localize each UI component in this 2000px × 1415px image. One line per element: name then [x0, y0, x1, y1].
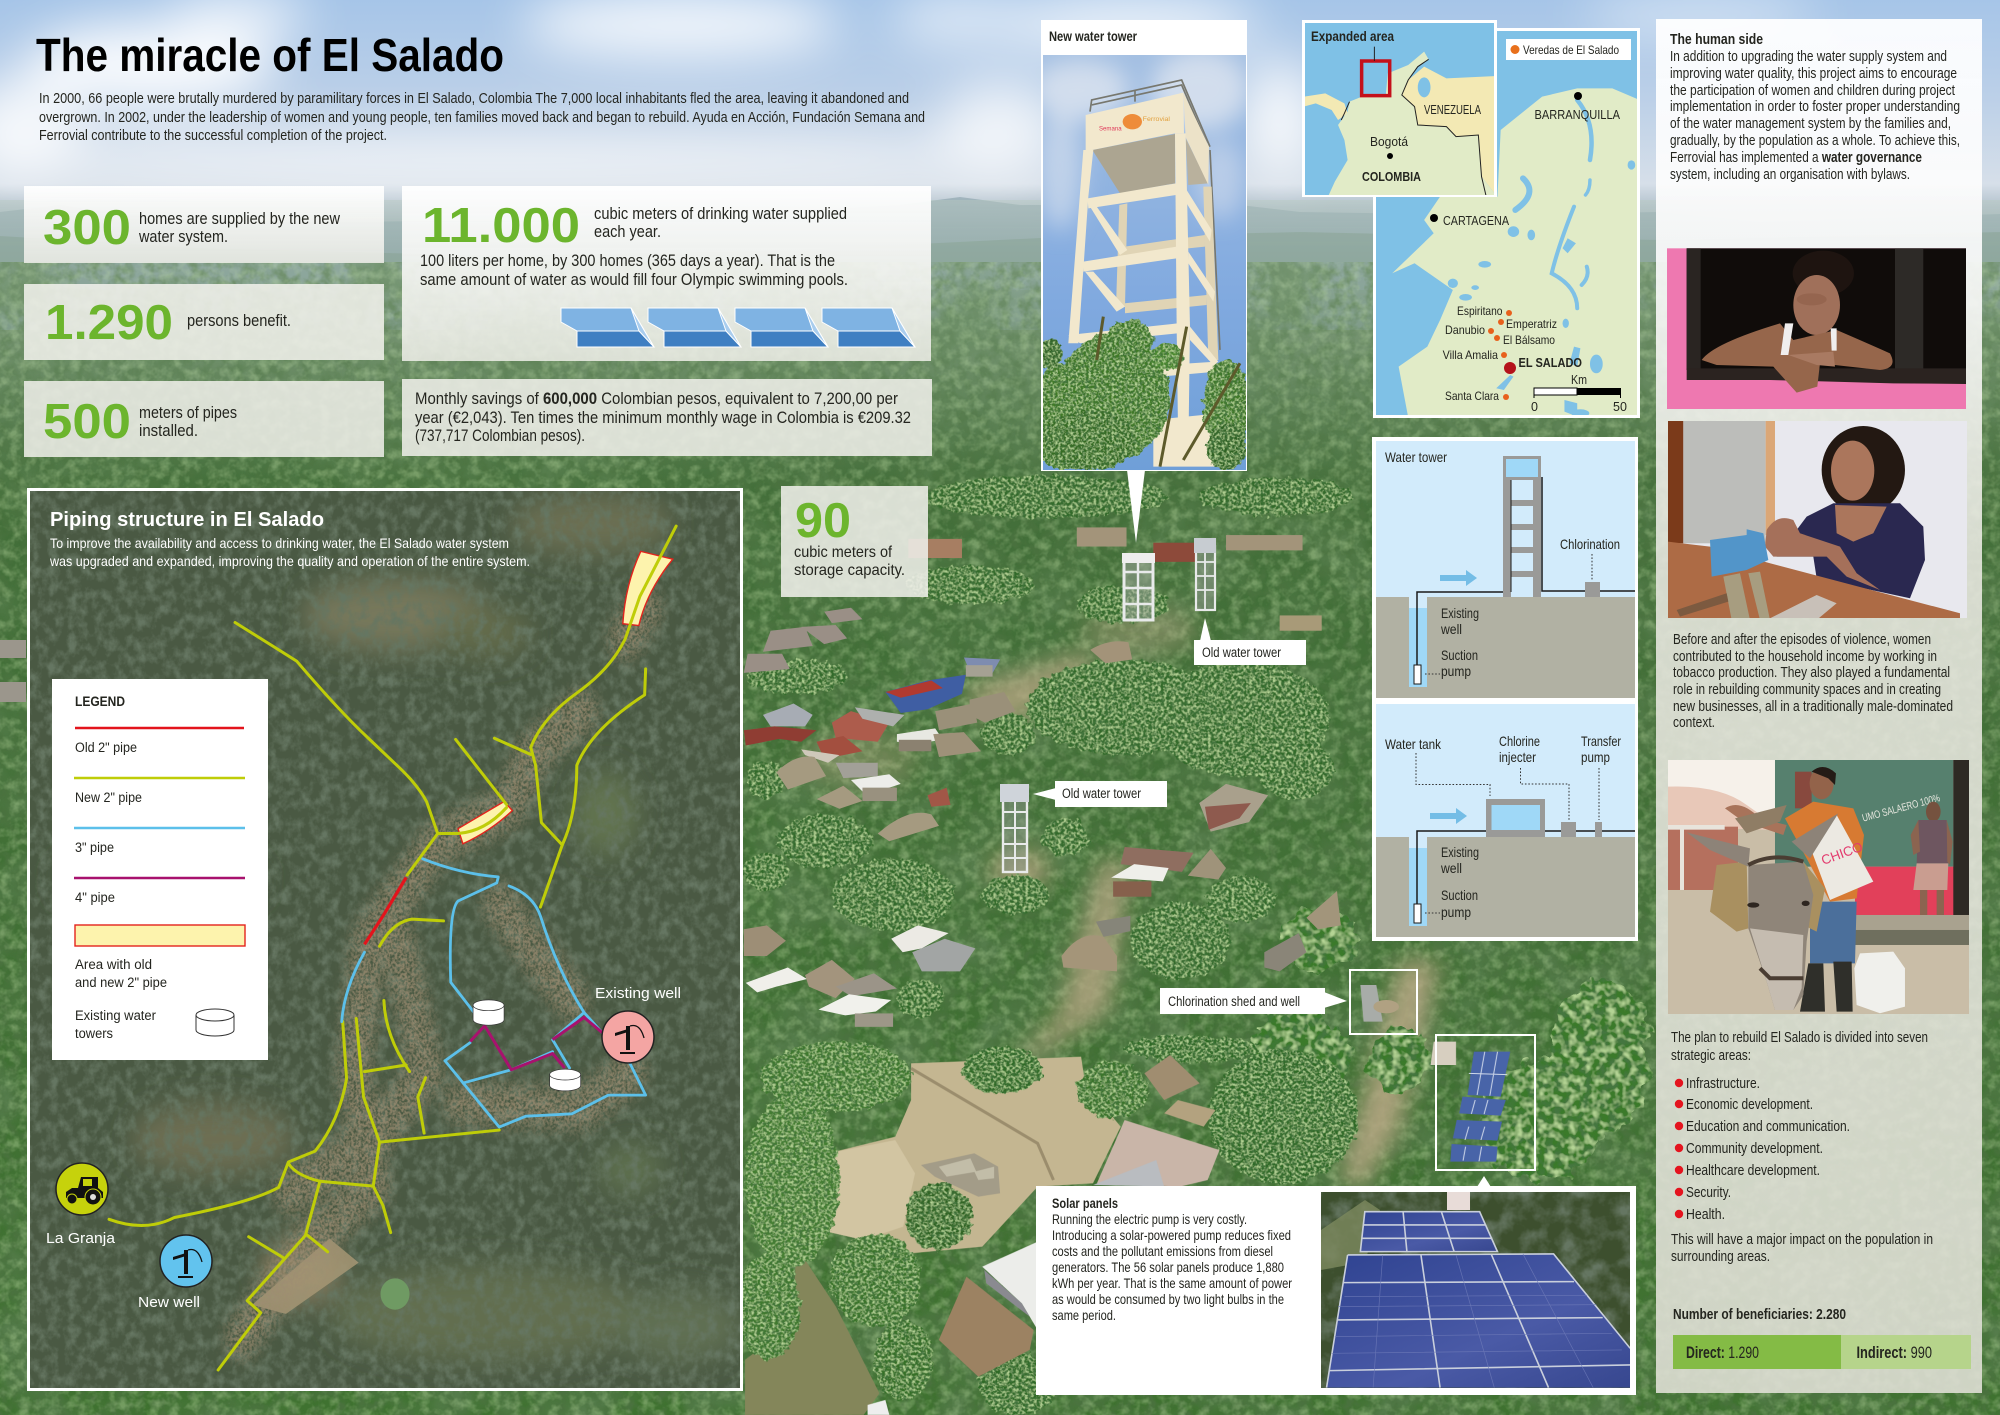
map scale bar: 50 — [1613, 400, 1627, 414]
women paragraph — [1673, 632, 1953, 731]
women paragraph: context. — [1673, 715, 1715, 731]
beneficiaries bar: Direct: 1.290 — [1686, 1343, 1759, 1362]
stat: 11.000 cubic meters with pools: each year. — [594, 223, 661, 241]
diagram: water tower system: Water tower — [1385, 449, 1447, 465]
diagram: water tower system: Suction — [1441, 647, 1478, 663]
stat: 1.290 persons: persons benefit. — [187, 312, 291, 330]
diagram: water tank system: injecter — [1499, 749, 1536, 765]
stat: 1.290 persons: 1.290 — [45, 296, 173, 350]
solar panels text: as would be consumed by two light bulbs in the — [1052, 1291, 1284, 1307]
3 inch pipes — [342, 859, 646, 1127]
scene water towers — [1000, 538, 1216, 872]
city labels — [1430, 92, 1620, 403]
solar panels text: Running the electric pump is very costly. — [1052, 1211, 1247, 1227]
photo: man with donkey — [1668, 760, 1970, 1015]
callout: old water tower (lower) — [1033, 781, 1167, 807]
stat: 11.000 cubic meters with pools — [402, 186, 931, 361]
right slope trees — [1250, 910, 1650, 1180]
diagram: water tank system: well — [1440, 860, 1462, 876]
stat: 500 meters: 500 — [43, 395, 131, 449]
dirt paths in upper village — [800, 604, 1440, 1190]
icon: existing well hand pump: Existing well — [595, 985, 681, 1002]
diagram: water tank system: Chlorine — [1499, 733, 1540, 749]
map scale bar — [1531, 388, 1627, 414]
highlight frames on shed and solar array — [1350, 970, 1535, 1170]
women paragraph: contributed to the household income by working in — [1673, 649, 1937, 665]
4 inch pipes — [470, 1017, 603, 1070]
diagram: water tank system — [1376, 704, 1635, 937]
stat: 300 homes: homes are supplied by the new — [139, 210, 340, 228]
human side paragraph — [1670, 49, 1960, 183]
panel: water tower system diagrams — [1372, 437, 1638, 941]
map heading: Piping structure in El Salado — [50, 508, 324, 531]
diagram: water tank system: pump — [1441, 904, 1471, 920]
bullet list: seven strategic areas: Health. — [1686, 1207, 1725, 1223]
solar panels text — [1052, 1195, 1292, 1323]
solar panels photo — [1321, 1192, 1630, 1388]
solar panels text: Solar panels — [1052, 1195, 1118, 1211]
plan intro text — [1671, 1030, 1928, 1064]
panel: solar panels — [1036, 1176, 1636, 1395]
old 2 inch pipe — [364, 877, 406, 944]
aerial solar array — [1360, 985, 1510, 1162]
intro paragraph: Ferrovial contribute to the successful completion of the project. — [39, 127, 387, 144]
stat: 11.000 cubic meters with pools: cubic meters of drinking water supplied — [594, 205, 847, 223]
panel: new water tower photo: New water tower — [1049, 29, 1138, 44]
intro paragraph — [39, 90, 925, 144]
human side paragraph: Ferrovial has implemented a water governance — [1670, 150, 1922, 166]
stat: 500 meters: installed. — [139, 422, 198, 440]
legend: New 2" pipe — [75, 790, 142, 805]
beneficiaries heading: Number of beneficiaries: 2.280 — [1673, 1307, 1846, 1323]
stat: 90 cubic meters storage: storage capacity. — [794, 562, 905, 579]
diagram: water tank system: Existing — [1441, 844, 1479, 860]
stat: 300 homes: water system. — [138, 228, 228, 246]
photo: man with donkey: CHICO — [1819, 839, 1865, 868]
left strip houses — [0, 640, 26, 702]
inset labels: COLOMBIA — [1362, 169, 1422, 184]
women paragraph: tobacco production. They also played a fundamental — [1673, 665, 1950, 681]
impact text: This will have a major impact on the population in — [1671, 1232, 1933, 1248]
icon: new well hand pump: New well — [138, 1294, 200, 1311]
legend: Area with old — [75, 957, 152, 972]
diagram: water tank system: Suction — [1441, 887, 1478, 903]
intro paragraph: In 2000, 66 people were brutally murdered by paramilitary forces in El Salado, Colombia The 7,000 local inhabitants fled the area, leaving it abandoned and — [39, 90, 909, 107]
legend: 4" pipe — [75, 890, 115, 905]
diagram: water tank system: Transfer — [1581, 733, 1621, 749]
beneficiaries bar — [1673, 1335, 1971, 1369]
diagram: water tank system: pump — [1581, 749, 1610, 765]
solar panels text: costs and the pollutant emissions from diesel — [1052, 1243, 1273, 1259]
city labels: Santa Clara — [1445, 389, 1499, 403]
stat: 11.000 cubic meters with pools: same amount of water as would fill four Olympic swimming pools. — [420, 271, 848, 289]
stat: 300 homes — [24, 186, 384, 263]
bullet list: seven strategic areas — [1675, 1076, 1850, 1223]
callout: old water tower (lower): Old water tower — [1062, 786, 1141, 801]
map description: To improve the availability and access to drinking water, the El Salado water system — [50, 535, 509, 551]
inset labels: VENEZUELA — [1424, 102, 1481, 117]
icons: existing water towers — [473, 1000, 581, 1091]
stat: 500 meters: meters of pipes — [139, 404, 237, 422]
city labels: CARTAGENA — [1443, 213, 1509, 228]
legend — [52, 679, 268, 1060]
solar panels text: generators. The 56 solar panels produce 1,880 — [1052, 1259, 1284, 1275]
stat: 500 meters — [24, 381, 384, 457]
solar panels text: Introducing a solar-powered pump reduces fixed — [1052, 1227, 1291, 1243]
title: The miracle of El Salado — [36, 29, 504, 81]
city labels: Espiritano — [1457, 304, 1503, 318]
city labels: Villa Amalia — [1443, 348, 1498, 362]
panel: location map — [1373, 28, 1640, 418]
savings text box — [402, 379, 932, 456]
solar panels text: kWh per year. That is the same amount of power — [1052, 1275, 1292, 1291]
panel: new water tower photo — [1030, 20, 1250, 543]
icon: new well hand pump — [138, 1235, 212, 1311]
diagram: water tower system: well — [1440, 621, 1462, 637]
panel: expanded area inset map — [1302, 20, 1497, 197]
city labels: EL SALADO — [1518, 355, 1582, 370]
city labels: El Bálsamo — [1503, 333, 1555, 347]
bullet list: seven strategic areas: Economic development. — [1686, 1097, 1813, 1113]
bullet list: seven strategic areas: Infrastructure. — [1686, 1076, 1760, 1092]
stat: 90 cubic meters storage — [781, 486, 928, 597]
city labels: BARRANQUILLA — [1534, 107, 1620, 122]
upper village trees — [744, 476, 1352, 1017]
inset labels: Bogotá — [1370, 134, 1409, 149]
city labels: Danubio — [1445, 323, 1485, 337]
panel: new water tower photo: Ferrovial — [1143, 116, 1171, 123]
diagram: water tank system: Water tank — [1385, 736, 1442, 752]
stat: 1.290 persons — [24, 284, 384, 360]
diagram: water tower system: Existing — [1441, 605, 1479, 621]
bullet list: seven strategic areas: Community development. — [1686, 1141, 1823, 1157]
legend: and new 2" pipe — [75, 975, 167, 990]
icon: existing well hand pump — [595, 985, 681, 1063]
impact text: surrounding areas. — [1671, 1249, 1770, 1265]
diagram: water tower system — [1376, 441, 1635, 698]
stat: 11.000 cubic meters with pools: 100 liters per home, by 300 homes (365 days a year). That is the — [420, 252, 835, 270]
photo: girl at pink window — [1667, 248, 1967, 410]
new 2 inch pipes — [109, 526, 676, 1370]
plan intro text: The plan to rebuild El Salado is divided into seven — [1671, 1030, 1928, 1046]
human side heading: The human side — [1670, 31, 1763, 48]
panel: the human side column — [1656, 19, 1982, 1393]
savings text box: (737,717 Colombian pesos). — [415, 427, 585, 445]
plan intro text: strategic areas: — [1671, 1048, 1751, 1064]
map legend: veredas: Veredas de El Salado — [1523, 43, 1619, 57]
stat: 90 cubic meters storage: cubic meters of — [794, 544, 893, 561]
village built-up area — [242, 609, 645, 1338]
legend: towers — [75, 1026, 113, 1041]
callout: old water tower (upper) — [1194, 618, 1306, 665]
callout: old water tower (upper): Old water tower — [1202, 645, 1281, 660]
diagram: water tower system: Chlorination — [1560, 536, 1620, 552]
women paragraph: role in rebuilding community spaces and in creating — [1673, 682, 1941, 698]
intro paragraph: overgrown. In 2002, under the leadership of women and young people, ten families moved back and began to rebuild. Ayuda en Acción, Fundación Semana and — [39, 109, 925, 126]
callout: chlorination shed and well: Chlorination shed and well — [1168, 994, 1300, 1009]
bullet list: seven strategic areas: Education and communication. — [1686, 1119, 1850, 1135]
savings text box: Monthly savings of 600,000 Colombian pesos, equivalent to 7,200,00 per — [415, 390, 898, 408]
photo: woman working with tobacco — [1668, 420, 1968, 620]
stat: 300 homes: 300 — [43, 201, 131, 255]
human side paragraph: In addition to upgrading the water supply system and — [1670, 49, 1947, 65]
rivers and lagoons — [1515, 100, 1592, 308]
legend: Existing water — [75, 1008, 156, 1023]
icon: tractor, La Granja: La Granja — [46, 1230, 116, 1247]
callout: chlorination shed and well — [1160, 988, 1347, 1014]
savings text box: year (€2,043). Ten times the minimum monthly wage in Colombia is €209.32 — [415, 409, 911, 427]
legend: Old 2" pipe — [75, 740, 137, 755]
stat: 90 cubic meters storage: 90 — [795, 494, 851, 548]
city labels: Emperatriz — [1506, 317, 1557, 331]
map scale bar: 0 — [1531, 400, 1538, 414]
photo: man with donkey: UMO SALAERO 100% — [1861, 792, 1942, 825]
map description — [49, 535, 530, 569]
women paragraph: Before and after the episodes of violence, women — [1673, 632, 1931, 648]
bullet list: seven strategic areas: Security. — [1686, 1185, 1731, 1201]
icon: tractor, La Granja — [46, 1163, 116, 1247]
panel: new water tower photo: Semana — [1099, 125, 1122, 132]
map legend: veredas — [1506, 39, 1631, 60]
bullet list: seven strategic areas: Healthcare development. — [1686, 1163, 1820, 1179]
impact text — [1671, 1232, 1933, 1265]
legend: 3" pipe — [75, 840, 114, 855]
land — [1392, 88, 1640, 417]
diagram: water tower system: pump — [1441, 663, 1471, 679]
yellow areas with old and new pipes — [458, 551, 673, 844]
stat: 11.000 cubic meters with pools: 11.000 — [422, 199, 580, 253]
inset labels — [1311, 29, 1481, 184]
icon: four Olympic swimming pools — [561, 308, 915, 347]
lower village: dirt yard, ruins and thatched houses — [737, 1035, 1358, 1415]
human side paragraph: system, including an organisation with bylaws. — [1670, 167, 1910, 183]
solar panels text: same period. — [1052, 1307, 1116, 1323]
satellite terrain — [128, 491, 740, 1368]
map description: was upgraded and expanded, improving the quality and operation of the entire system. — [49, 553, 530, 569]
beneficiaries bar: Indirect: 990 — [1856, 1343, 1932, 1362]
legend: LEGEND — [75, 693, 125, 709]
city labels: Km — [1571, 373, 1587, 387]
inset labels: Expanded area — [1311, 29, 1394, 44]
